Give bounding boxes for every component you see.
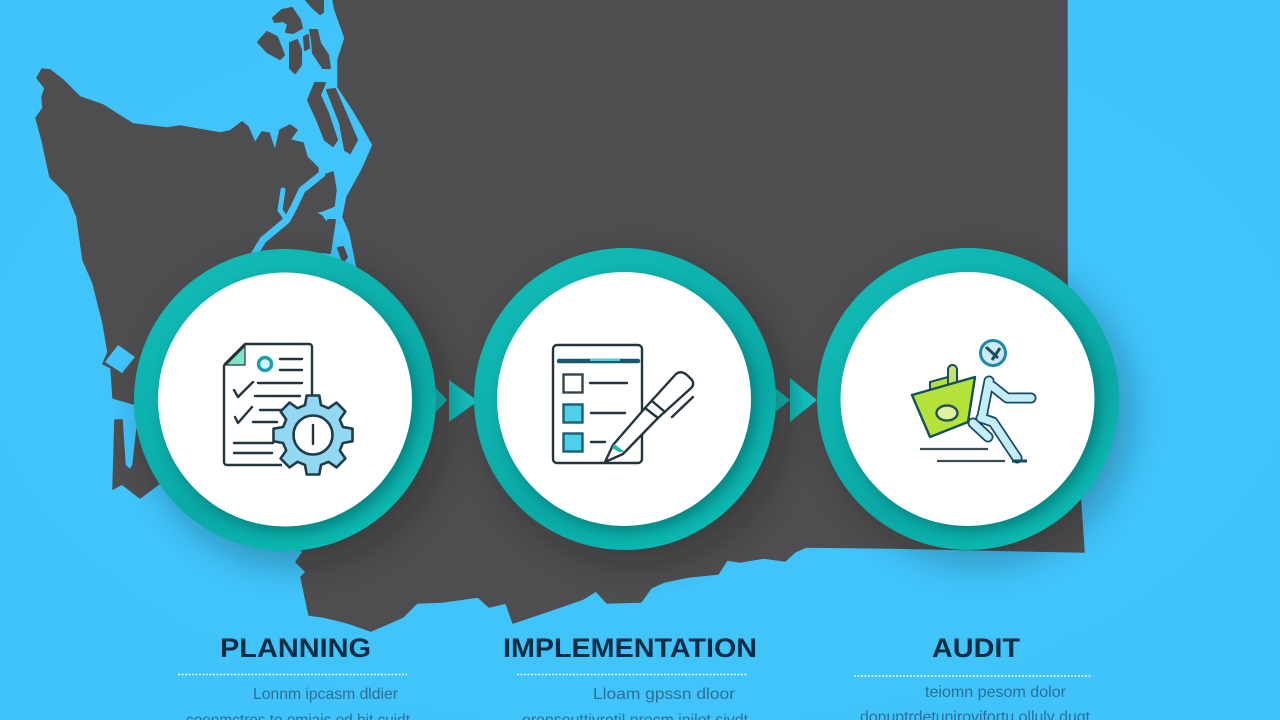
step circle: implementation — [474, 248, 786, 562]
step text: planning: Lonnm ipcasm dldier — [253, 686, 399, 703]
step text: audit: teiomn pesom dolor — [925, 684, 1067, 701]
icon: runner carrying a bag — [912, 340, 1031, 461]
step text: audit: AUDIT — [932, 633, 1021, 663]
step text: implementation — [503, 633, 757, 720]
step text: planning: PLANNING — [220, 633, 371, 663]
step circle: audit — [817, 248, 1129, 562]
step text: audit — [854, 633, 1091, 720]
map of Washington state — [36, 0, 1084, 631]
step text: implementation: IMPLEMENTATION — [503, 633, 757, 663]
islands — [258, 0, 357, 262]
step text: implementation: Lloam gpssn dloor — [593, 686, 736, 703]
icon: checklist and pen — [553, 345, 693, 463]
arrow: implementation to audit — [773, 378, 817, 422]
water channels — [252, 174, 322, 258]
coastal inlet — [105, 345, 135, 373]
step circle: planning — [134, 249, 446, 563]
arrow: planning to implementation — [434, 380, 478, 422]
step text: planning — [178, 633, 411, 720]
icon: document with gear — [224, 344, 352, 474]
